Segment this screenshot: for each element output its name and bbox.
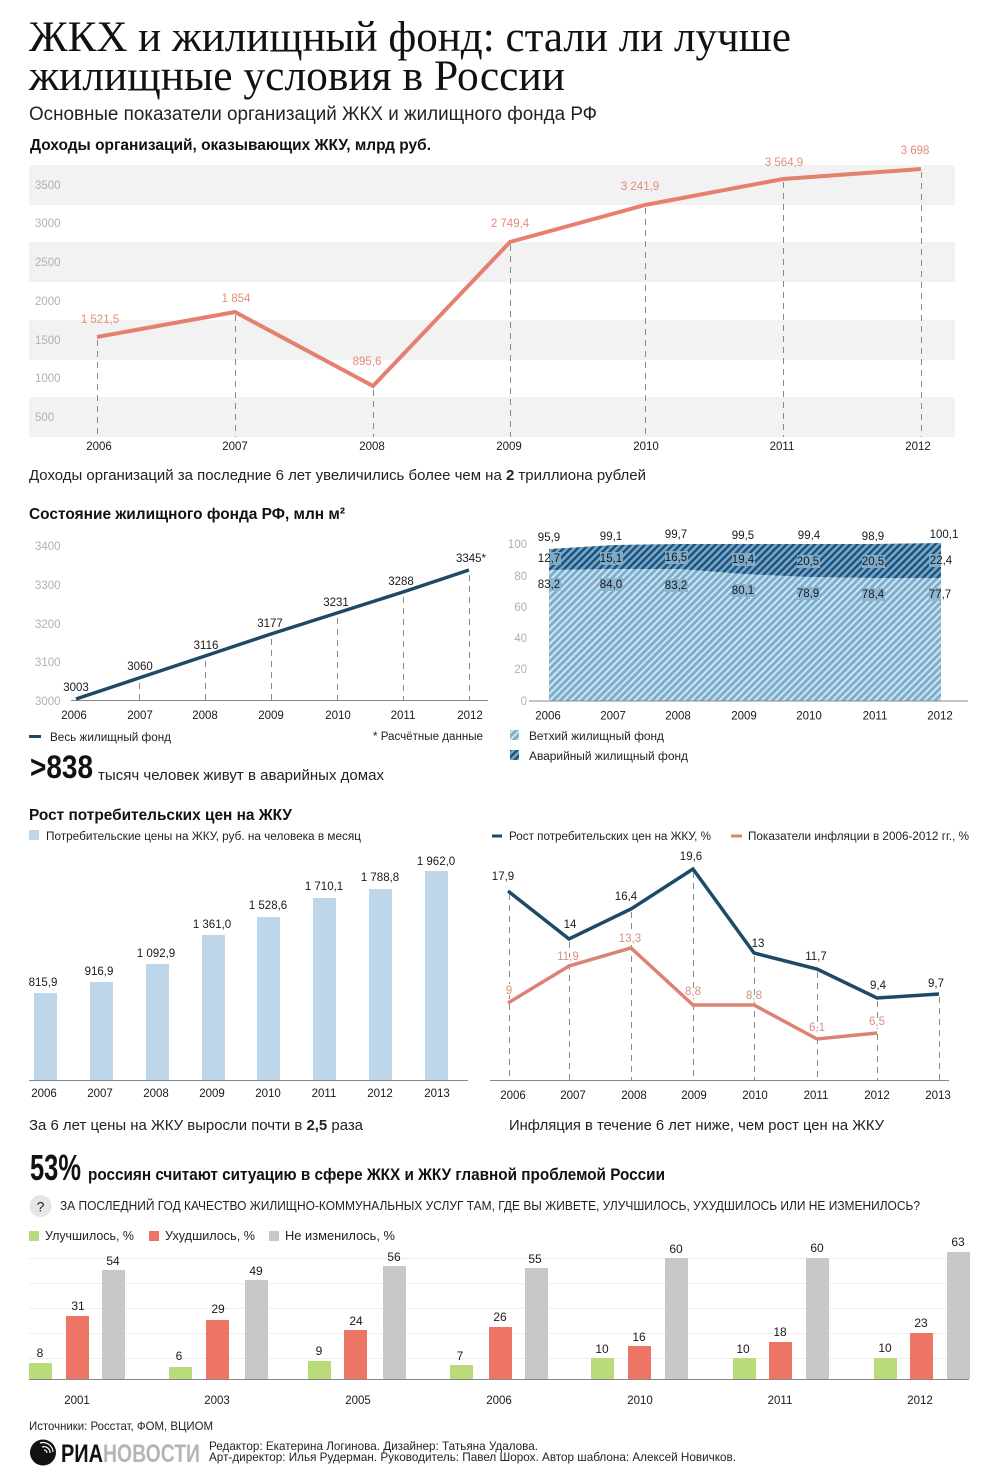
line chart: price growth vs inflation: 16,4 (615, 891, 638, 903)
bars: 2006: 7 (457, 1349, 464, 1363)
legend: price and inflation lines: Рост потребительских цен на ЖКУ, % (509, 831, 711, 843)
panel: housing stock line chart: 2006 (61, 710, 87, 722)
bars: 2011: 18 (773, 1325, 787, 1339)
panel: housing stock line chart: 3100 (35, 657, 61, 669)
panel: income line chart: 3500 (35, 180, 61, 192)
line chart: price growth vs inflation: 8,8 (685, 986, 701, 998)
line chart: price growth vs inflation: 2009 (681, 1090, 707, 1102)
bar chart: consumer prices: 1 092,9 (137, 948, 175, 960)
line chart: price growth vs inflation: 13,3 (619, 933, 641, 945)
line chart: price growth vs inflation: 9 (506, 985, 512, 997)
bars: 2010: 2010 (627, 1395, 653, 1407)
panel: stacked area chart: 2011 (863, 710, 887, 722)
heading: housing stock: Состояние жилищного фонда РФ, млн м² (29, 506, 345, 523)
panel: stacked area chart: 2006 (535, 710, 561, 722)
line chart: price growth vs inflation: 8,8 (746, 990, 762, 1002)
panel: income line chart: 895,6 (353, 356, 381, 368)
bars: 2001: 31 (71, 1299, 85, 1313)
line chart: price growth vs inflation: 19,6 (680, 851, 702, 863)
panel: stacked area chart: 22,4 (930, 555, 953, 567)
callout: 838 thousand: тысяч человек живут в аварийных домах (98, 768, 385, 784)
panel: stacked area chart: 40 (514, 633, 527, 645)
credits (209, 1439, 736, 1464)
panel: housing stock line chart: 2009 (258, 710, 284, 722)
bars: 2005: 2005 (345, 1395, 371, 1407)
panel: stacked area chart: 0 (521, 696, 527, 708)
callout: 838 thousand: >838 (30, 749, 93, 785)
panel: income line chart: 3 698 (901, 145, 929, 157)
panel: stacked area chart: 100,1 (930, 529, 958, 541)
panel: stacked area chart: 83,2 (538, 579, 560, 591)
text: price note: За 6 лет цены на ЖКУ выросли почти в 2,5 раза (29, 1118, 364, 1134)
panel: income line chart: 500 (35, 412, 54, 424)
bars: 2006: 26 (493, 1310, 507, 1324)
panel: stacked area chart: 99,7 (665, 529, 687, 541)
bars: 2012: 23 (914, 1316, 928, 1330)
bar chart: consumer prices: 916,9 (85, 966, 113, 978)
text: inflation note: Инфляция в течение 6 лет ниже, чем рост цен на ЖКУ (509, 1118, 885, 1134)
line chart: price growth vs inflation: 17,9 (492, 871, 514, 883)
panel: stacked area chart: 84,0 (600, 579, 622, 591)
bars: 2011: 60 (810, 1241, 824, 1255)
bar chart: consumer prices: 2012 (367, 1088, 393, 1100)
panel: housing stock line chart: 3200 (35, 619, 61, 631)
panel: housing stock line chart: 2011 (391, 710, 415, 722)
bars: 2011: 2011 (768, 1395, 792, 1407)
footnote: estimated data: * Расчётные данные (373, 731, 483, 743)
panel: income line chart: 2008 (359, 441, 385, 453)
panel: income line chart: 2010 (633, 441, 659, 453)
panel: stacked area chart: 99,4 (798, 530, 821, 542)
panel: stacked area chart: 12,7 (538, 553, 560, 565)
line chart: price growth vs inflation: 2007 (560, 1090, 586, 1102)
panel: income line chart: 2011 (770, 441, 794, 453)
bar chart: consumer prices: 2013 (424, 1088, 450, 1100)
title: ЖКХ и жилищный фонд: стали ли лучше (29, 14, 791, 61)
legend: survey (29, 1229, 395, 1243)
bar chart: consumer prices: 2006 (31, 1088, 57, 1100)
panel: stacked area chart: 2009 (731, 710, 757, 722)
bars: 2005: 56 (387, 1250, 401, 1264)
panel: stacked area chart: 99,1 (600, 531, 622, 543)
panel: housing stock line chart: 3060 (127, 661, 153, 673)
bars: 2010: 60 (669, 1242, 683, 1256)
panel: stacked area chart: 80,1 (732, 585, 754, 597)
bars: 2003: 49 (249, 1264, 263, 1278)
logo: RIA Novosti: РИА (61, 1440, 103, 1468)
panel: stacked area chart: 78,4 (862, 589, 885, 601)
legend: stacked area: Ветхий жилищный фонд (529, 731, 664, 743)
panel: income line chart: 2006 (86, 441, 112, 453)
panel: income line chart: 1 521,5 (81, 314, 119, 326)
panel: stacked area chart: 2007 (600, 710, 626, 722)
panel: income line chart: 3000 (35, 218, 61, 230)
legend: housing stock: Весь жилищный фонд (50, 732, 171, 744)
panel: housing stock line chart: 3300 (35, 580, 61, 592)
panel: housing stock line chart: 3003 (63, 682, 89, 694)
panel: stacked area chart: 78,9 (797, 588, 819, 600)
callout: 53 percent (30, 1147, 665, 1188)
panel: income line chart: 1500 (35, 335, 61, 347)
line chart: price growth vs inflation: 9,7 (928, 978, 944, 990)
bars: 2001: 54 (106, 1254, 120, 1268)
panel: housing stock line chart: 3231 (323, 597, 349, 609)
panel: income line chart: 2500 (35, 257, 61, 269)
bar chart: consumer prices: 1 710,1 (305, 881, 343, 893)
panel: income line chart: 3 564,9 (765, 157, 803, 169)
bar chart: consumer prices: 1 528,6 (249, 900, 287, 912)
panel: stacked area chart: 80 (514, 571, 527, 583)
bar chart: consumer prices (29, 856, 468, 1100)
panel: stacked area chart: 77,7 (929, 589, 951, 601)
bar chart: consumer prices: 2009 (199, 1088, 225, 1100)
bars: 2001: 8 (37, 1346, 44, 1360)
panel: stacked area chart: 99,5 (732, 530, 754, 542)
bars: 2005: 9 (316, 1344, 323, 1358)
credits: Редактор: Екатерина Логинова. Дизайнер: Татьяна Удалова. (209, 1439, 538, 1453)
panel: housing stock line chart: 2008 (192, 710, 218, 722)
bar chart: consumer prices: 2008 (143, 1088, 169, 1100)
bars: 2012 (874, 1235, 970, 1407)
bars: 2012: 63 (951, 1235, 965, 1249)
bars: 2006 (450, 1252, 548, 1407)
legend: stacked area (510, 730, 688, 763)
panel: income line chart: 2007 (222, 441, 248, 453)
icon: question mark: ? (37, 1198, 45, 1214)
bars: 2011: 10 (736, 1342, 750, 1356)
panel: income line chart: 2 749,4 (491, 218, 530, 230)
line chart: price growth vs inflation: 2010 (742, 1090, 768, 1102)
bars: 2001: 2001 (64, 1395, 90, 1407)
heading: price growth: Рост потребительских цен на ЖКУ (29, 807, 293, 824)
survey question: ЗА ПОСЛЕДНИЙ ГОД КАЧЕСТВО ЖИЛИЩНО-КОММУНАЛЬНЫХ УСЛУГ ТАМ, ГДЕ ВЫ ЖИВЕТЕ, УЛУЧШИЛОСЬ, УХУДШИЛОСЬ ИЛИ НЕ ИЗМЕНИЛОСЬ? (60, 1198, 920, 1213)
panel: stacked area chart: 19,4 (732, 554, 755, 566)
bars: 2010: 10 (595, 1342, 609, 1356)
line chart: price growth vs inflation: 11,7 (805, 951, 827, 963)
bar chart: consumer prices: 2007 (87, 1088, 113, 1100)
callout: 53 percent: 53% (30, 1147, 81, 1188)
legend: survey: Ухудшилось, % (165, 1229, 255, 1243)
panel: stacked area chart: 2010 (796, 710, 822, 722)
panel: housing stock line chart: 2007 (127, 710, 153, 722)
bars: 2003 (169, 1264, 268, 1407)
panel: income line chart: 1000 (35, 373, 61, 385)
panel: stacked area chart (508, 529, 968, 722)
panel: stacked area chart: 98,9 (862, 531, 884, 543)
panel: housing stock line chart: 3116 (194, 640, 218, 652)
bars: 2012: 2012 (907, 1395, 933, 1407)
panel: income line chart: 2009 (496, 441, 522, 453)
text: income note: Доходы организаций за последние 6 лет увеличились более чем на 2 триллиона рублей (29, 468, 646, 484)
icon: question mark (30, 1195, 52, 1217)
line chart: price growth vs inflation: 9,4 (870, 980, 887, 992)
bar chart: consumer prices: 1 962,0 (417, 856, 455, 868)
bars: 2003: 2003 (204, 1395, 230, 1407)
legend: price bars: Потребительские цены на ЖКУ, руб. на человека в месяц (46, 831, 361, 843)
callout: 838 thousand (30, 749, 385, 785)
line chart: price growth vs inflation (490, 851, 951, 1102)
bars: 2001 (29, 1254, 125, 1407)
panel: stacked area chart: 2012 (927, 710, 953, 722)
legend: price and inflation lines (492, 831, 969, 843)
bars: 2010 (591, 1242, 688, 1407)
legend: price and inflation lines: Показатели инфляции в 2006-2012 гг., % (748, 831, 969, 843)
panel: income line chart (29, 145, 955, 453)
line chart: price growth vs inflation: 2012 (864, 1090, 890, 1102)
line chart: price growth vs inflation: 2008 (621, 1090, 647, 1102)
line chart: price growth vs inflation: 13 (752, 938, 764, 950)
legend: survey: Не изменилось, % (285, 1229, 395, 1243)
panel: stacked area chart: 100 (508, 539, 527, 551)
panel: stacked area chart: 15,1 (600, 553, 622, 565)
bars: 2010: 16 (632, 1330, 646, 1344)
panel: stacked area chart: 83,2 (665, 580, 687, 592)
bar chart: consumer prices: 1 361,0 (193, 919, 231, 931)
bars: 2011 (733, 1241, 829, 1407)
bars: 2003: 6 (176, 1349, 183, 1363)
bar chart: consumer prices: 815,9 (29, 977, 57, 989)
panel: stacked area chart: 60 (514, 602, 527, 614)
panel: stacked area chart: 95,9 (538, 532, 560, 544)
panel: stacked area chart: 20,5 (862, 556, 884, 568)
title: жилищные условия в России (28, 53, 565, 100)
panel: housing stock line chart: 3177 (257, 618, 283, 630)
legend: survey: Улучшилось, % (45, 1229, 134, 1243)
panel: stacked area chart: 20,5 (797, 556, 819, 568)
bar chart: consumer prices: 2010 (255, 1088, 281, 1100)
bar chart: survey results (29, 1235, 970, 1407)
bars: 2012: 10 (878, 1341, 892, 1355)
bar chart: consumer prices: 1 788,8 (361, 872, 399, 884)
line chart: price growth vs inflation: 14 (564, 919, 577, 931)
logo: RIA Novosti (30, 1440, 200, 1468)
panel: stacked area chart: 2008 (665, 710, 691, 722)
bars: 2005 (308, 1250, 406, 1407)
line chart: price growth vs inflation: 2011 (804, 1090, 828, 1102)
callout: 53 percent: россиян считают ситуацию в сфере ЖКХ и ЖКУ главной проблемой России (88, 1166, 665, 1184)
sources: Источники: Росстат, ФОМ, ВЦИОМ (29, 1419, 213, 1433)
bars: 2006: 55 (528, 1252, 542, 1266)
panel: income line chart: 2000 (35, 296, 61, 308)
panel: housing stock line chart: 3400 (35, 541, 61, 553)
panel: housing stock line chart (35, 541, 488, 722)
panel: income line chart: 2012 (905, 441, 931, 453)
line chart: price growth vs inflation: 6,5 (869, 1016, 885, 1028)
bars: 2006: 2006 (486, 1395, 512, 1407)
panel: income line chart: 3 241,9 (621, 181, 659, 193)
bar chart: consumer prices: 2011 (312, 1088, 336, 1100)
panel: housing stock line chart: 3345* (456, 553, 487, 565)
bars: 2005: 24 (349, 1314, 363, 1328)
panel: income line chart: 1 854 (222, 293, 251, 305)
line chart: price growth vs inflation: 6,1 (809, 1022, 825, 1034)
bars: 2003: 29 (211, 1302, 225, 1316)
line chart: price growth vs inflation: 11,9 (557, 951, 579, 963)
panel: housing stock line chart: 2012 (457, 710, 483, 722)
line chart: price growth vs inflation: 2006 (500, 1090, 526, 1102)
credits: Арт-директор: Илья Рудерман. Руководитель: Павел Шорох. Автор шаблона: Алексей Новичков. (209, 1450, 736, 1464)
panel: housing stock line chart: 2010 (325, 710, 351, 722)
logo: RIA Novosti: НОВОСТИ (103, 1440, 200, 1468)
legend: stacked area: Аварийный жилищный фонд (529, 751, 688, 763)
panel: housing stock line chart: 3288 (388, 576, 414, 588)
heading: income: Доходы организаций, оказывающих ЖКУ, млрд руб. (30, 137, 431, 154)
title (28, 14, 791, 100)
subtitle: Основные показатели организаций ЖКХ и жилищного фонда РФ (29, 104, 597, 125)
line chart: price growth vs inflation: 2013 (925, 1090, 951, 1102)
panel: housing stock line chart: 3000 (35, 696, 61, 708)
panel: stacked area chart: 20 (514, 664, 527, 676)
panel: stacked area chart: 16,5 (665, 552, 687, 564)
